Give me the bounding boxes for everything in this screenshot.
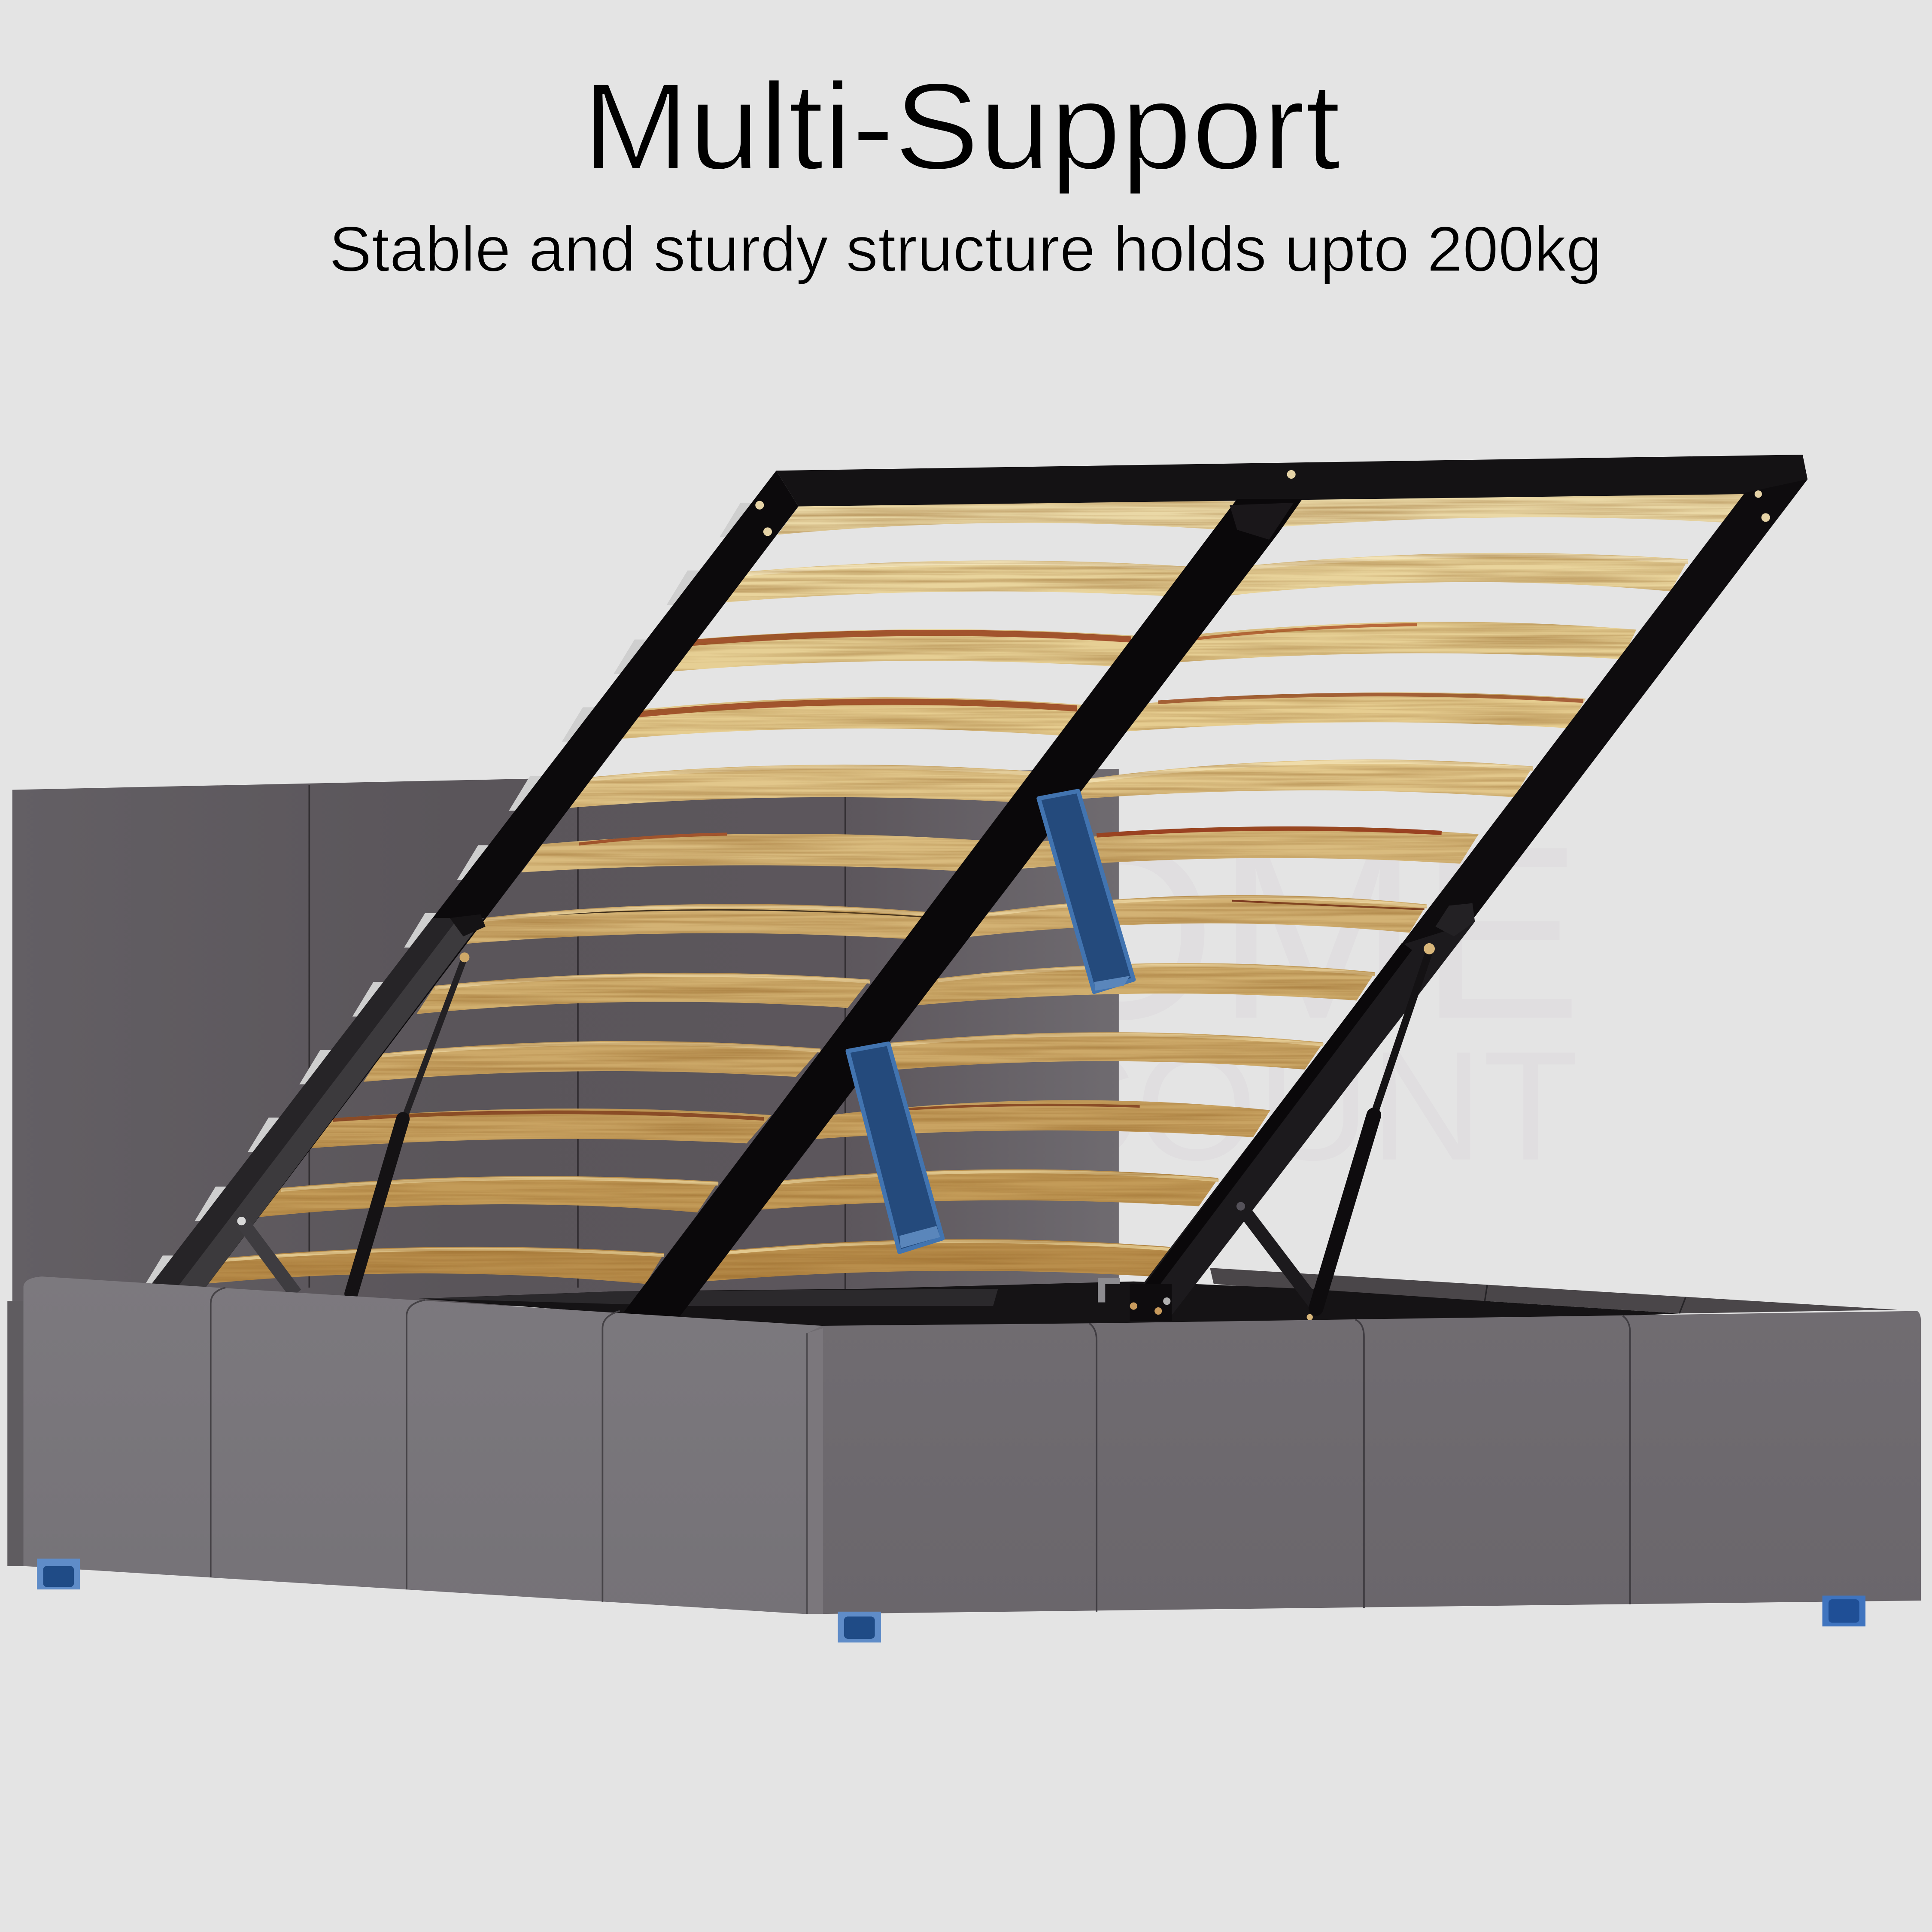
blue foot left bbox=[37, 1558, 80, 1589]
slat row 3 bbox=[671, 622, 1636, 671]
metal lift frame bbox=[148, 455, 1807, 1318]
blue foot right bbox=[1823, 1596, 1865, 1626]
pivot pins bbox=[1130, 1284, 1172, 1321]
front rail bbox=[807, 1311, 1921, 1614]
subtitle: Stable and sturdy structure holds upto 200kg bbox=[329, 213, 1602, 285]
left scissor arm bbox=[237, 1217, 296, 1294]
watermark: COUNT bbox=[1023, 1019, 1578, 1193]
slat row 10 bbox=[308, 1100, 1270, 1148]
left side rail bbox=[7, 1276, 822, 1614]
far side rail bbox=[1210, 1268, 1898, 1313]
frame: centre bar bbox=[621, 499, 1302, 1316]
slat row 8 bbox=[416, 963, 1375, 1014]
frame side tabs bbox=[142, 503, 758, 1290]
frame: right bar bbox=[1130, 479, 1807, 1318]
left gas strut bbox=[351, 952, 469, 1294]
slat row 12 bbox=[204, 1239, 1170, 1284]
slat row 7 bbox=[466, 895, 1427, 944]
slat row 9 bbox=[364, 1032, 1323, 1082]
storage interior bbox=[419, 1278, 1680, 1328]
slat row 5 bbox=[564, 759, 1533, 808]
slat row 2 bbox=[723, 553, 1688, 602]
slat row 4 bbox=[616, 692, 1586, 739]
right scissor arm bbox=[1236, 1202, 1315, 1303]
frame: top bar bbox=[776, 455, 1807, 507]
right gas strut bbox=[1307, 943, 1435, 1320]
slat row 11 bbox=[256, 1169, 1218, 1217]
watermark bbox=[850, 795, 1582, 1193]
blue highlighted support leg upper bbox=[1039, 791, 1133, 992]
frame: left bar bbox=[148, 471, 799, 1289]
watermark: HOME bbox=[850, 795, 1582, 1070]
slat row 1 bbox=[778, 493, 1745, 535]
blue foot centre bbox=[838, 1612, 881, 1643]
bolts bbox=[755, 470, 1770, 536]
headboard bbox=[12, 769, 1119, 1306]
slat row 6 bbox=[521, 828, 1479, 872]
wooden slats bbox=[204, 493, 1745, 1284]
title: Multi-Support bbox=[583, 57, 1341, 196]
blue highlighted support leg lower bbox=[848, 1044, 942, 1252]
